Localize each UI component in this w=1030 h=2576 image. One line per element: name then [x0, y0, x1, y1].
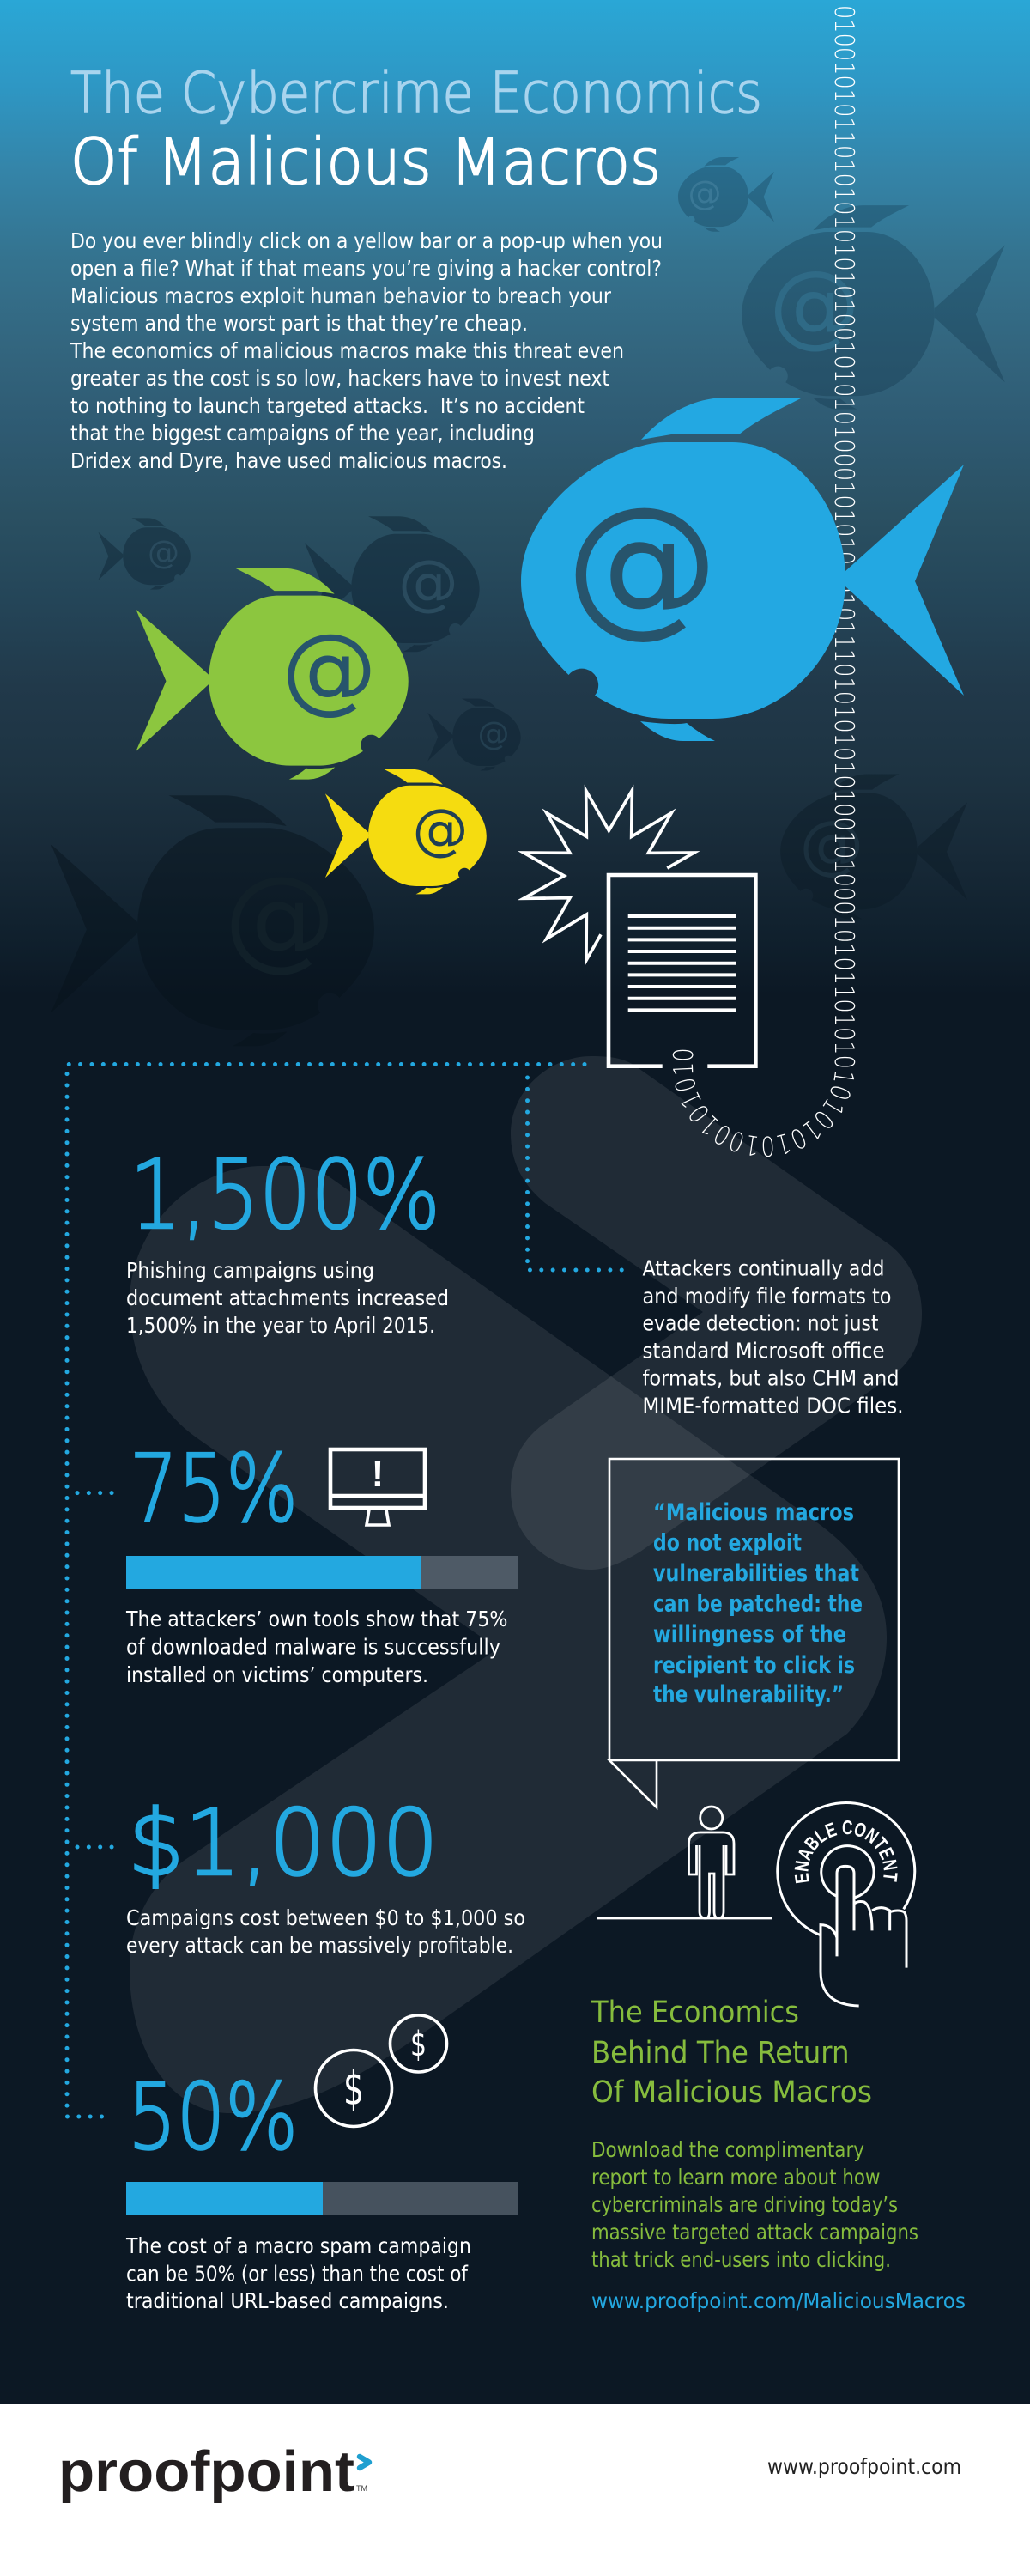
intro paragraph: Malicious macros exploit human behavior to breach your: [70, 283, 612, 308]
stat: $1,000: Campaigns cost between $0 to $1,000 so: [126, 1905, 525, 1930]
faded fish: small lower middle: @: [477, 715, 510, 752]
faded fish: medium behind green fish: [305, 516, 480, 652]
stat: 75%: The attackers’ own tools show that 75%: [125, 1607, 508, 1631]
faded fish: left small: [98, 518, 191, 590]
faded fish: right lower: [780, 775, 967, 919]
quote callout: the vulnerability.”: [653, 1681, 844, 1708]
intro paragraph: The economics of malicious macros make this threat even: [70, 338, 624, 363]
faded fish: left small: @: [148, 534, 179, 571]
title: [70, 60, 762, 199]
call to action paragraph: [591, 2137, 918, 2272]
stat: $1,000: every attack can be massively profitable.: [126, 1933, 513, 1958]
quote callout: can be patched: the: [653, 1590, 863, 1618]
icon: monitor alert: !: [372, 1453, 384, 1495]
stat: $1,000: $1,000: [128, 1790, 439, 1896]
icon: starburst: [524, 791, 694, 960]
faded fish: bottom left large: @: [224, 852, 336, 982]
stat: 50%: The cost of a macro spam campaign: [125, 2233, 471, 2258]
text: file formats: [642, 1255, 903, 1419]
stat: 75%: [125, 1436, 518, 1687]
quote callout: [609, 1459, 899, 1807]
text: file formats: and modify file formats to: [642, 1284, 891, 1309]
dotted connector: left rail: [67, 1065, 585, 2117]
progress bar: 50%: [126, 2182, 518, 2215]
quote callout: “Malicious macros: [653, 1499, 854, 1526]
call to action heading: Of Malicious Macros: [591, 2075, 872, 2110]
faded fish: top small: [678, 157, 774, 232]
title: The Cybercrime Economics: [70, 60, 762, 126]
call to action paragraph: that trick end-users into clicking.: [591, 2247, 891, 2272]
faded fish: top large: [742, 205, 1005, 410]
footer url: www.proofpoint.com: [767, 2454, 961, 2479]
icon: dollar coins: $: [410, 2025, 427, 2064]
title: Of Malicious Macros: [70, 125, 661, 199]
text: file formats: Attackers continually add: [642, 1255, 884, 1281]
call to action paragraph: Download the complimentary: [591, 2137, 864, 2162]
intro paragraph: open a file? What if that means you’re giving a hacker control?: [70, 256, 662, 281]
green fish: @: [282, 614, 377, 725]
text: file formats: standard Microsoft office: [642, 1338, 884, 1364]
stat: $1,000: [126, 1790, 525, 1958]
call to action heading: Behind The Return: [591, 2036, 850, 2070]
call to action heading: The Economics: [591, 1996, 799, 2030]
call to action paragraph: massive targeted attack campaigns: [591, 2220, 918, 2245]
green fish: [136, 568, 409, 780]
call to action heading: [591, 1996, 872, 2110]
text: file formats: formats, but also CHM and: [642, 1365, 900, 1391]
icon: document: [609, 875, 755, 1066]
dotted connector: right branch: [527, 1078, 624, 1270]
dotted tick: $1,000: [77, 1844, 112, 1850]
text: file formats: evade detection: not just: [642, 1310, 879, 1336]
yellow fish: @: [412, 798, 469, 862]
icon: dollar coins: [316, 2015, 446, 2126]
icon: dollar coins: $: [343, 2062, 364, 2116]
intro paragraph: greater as the cost is so low, hackers have to invest next: [70, 366, 609, 391]
call to action paragraph: report to learn more about how: [591, 2165, 881, 2190]
quote callout: recipient to click is: [653, 1652, 855, 1679]
faded fish: small lower middle: [427, 698, 521, 770]
stat: 50%: 50%: [128, 2064, 298, 2170]
faded fish: bottom left large: [51, 795, 374, 1046]
stat: 1,500%: 1,500% in the year to April 2015.: [126, 1313, 435, 1338]
intro paragraph: to nothing to launch targeted attacks. It’s no accident: [70, 393, 585, 418]
stat: 1,500%: document attachments increased: [126, 1285, 449, 1310]
dotted tick: 75%: [77, 1491, 112, 1495]
stat: 75%: of downloaded malware is successfully: [126, 1635, 500, 1659]
report link: www.proofpoint.com/MaliciousMacros: [591, 2288, 966, 2313]
blue fish: [521, 398, 964, 741]
icon: monitor alert: [330, 1449, 425, 1525]
proofpoint chevron watermark: [130, 1056, 922, 2113]
stat: 50%: traditional URL-based campaigns.: [126, 2288, 449, 2313]
stat: 1,500%: 1,500%: [130, 1140, 440, 1251]
icon: enable content button and hand: ENABLE CONTENT: [795, 1820, 898, 1884]
stat: 50%: [125, 2015, 518, 2313]
icon: person on ledge: [597, 1807, 772, 1918]
stat: 50%: can be 50% (or less) than the cost of: [126, 2262, 469, 2286]
yellow fish: [325, 769, 487, 894]
blue fish: @: [566, 474, 718, 652]
proofpoint logo: TM: [356, 2484, 367, 2493]
intro paragraph: system and the worst part is that they’re cheap.: [70, 311, 528, 336]
intro paragraph: Dridex and Dyre, have used malicious macros.: [70, 448, 507, 473]
faded fish: right lower: @: [800, 806, 863, 882]
stat: 75%: 75%: [130, 1436, 298, 1543]
quote callout: vulnerabilities that: [653, 1560, 859, 1587]
text: file formats: MIME-formatted DOC files.: [642, 1393, 903, 1419]
proofpoint logo: proofpoint: [58, 2439, 354, 2504]
quote callout: do not exploit: [653, 1530, 802, 1556]
gradient header background: [0, 0, 1030, 996]
intro paragraph: that the biggest campaigns of the year, including: [70, 421, 535, 446]
stat: 1,500%: [126, 1140, 449, 1338]
faded fish: top small: @: [688, 174, 721, 213]
footer band: [0, 2404, 1030, 2576]
progress bar: 75%: [126, 1556, 518, 1589]
faded fish: medium behind green fish: @: [398, 547, 458, 617]
icon: enable content button and hand: [776, 1801, 917, 2008]
intro paragraph: Do you ever blindly click on a yellow bar or a pop-up when you: [70, 228, 663, 253]
stat: 75%: installed on victims’ computers.: [126, 1662, 428, 1687]
quote callout: willingness of the: [653, 1621, 846, 1648]
faded fish: top large: @: [769, 252, 860, 357]
binary stream: 010010101101010101010100101010100010101010101110101010101001010001010110101010101010100101010: [673, 7, 855, 1157]
intro paragraph: [70, 228, 663, 473]
call to action paragraph: cybercriminals are driving today’s: [591, 2192, 898, 2217]
stat: 1,500%: Phishing campaigns using: [126, 1258, 374, 1283]
